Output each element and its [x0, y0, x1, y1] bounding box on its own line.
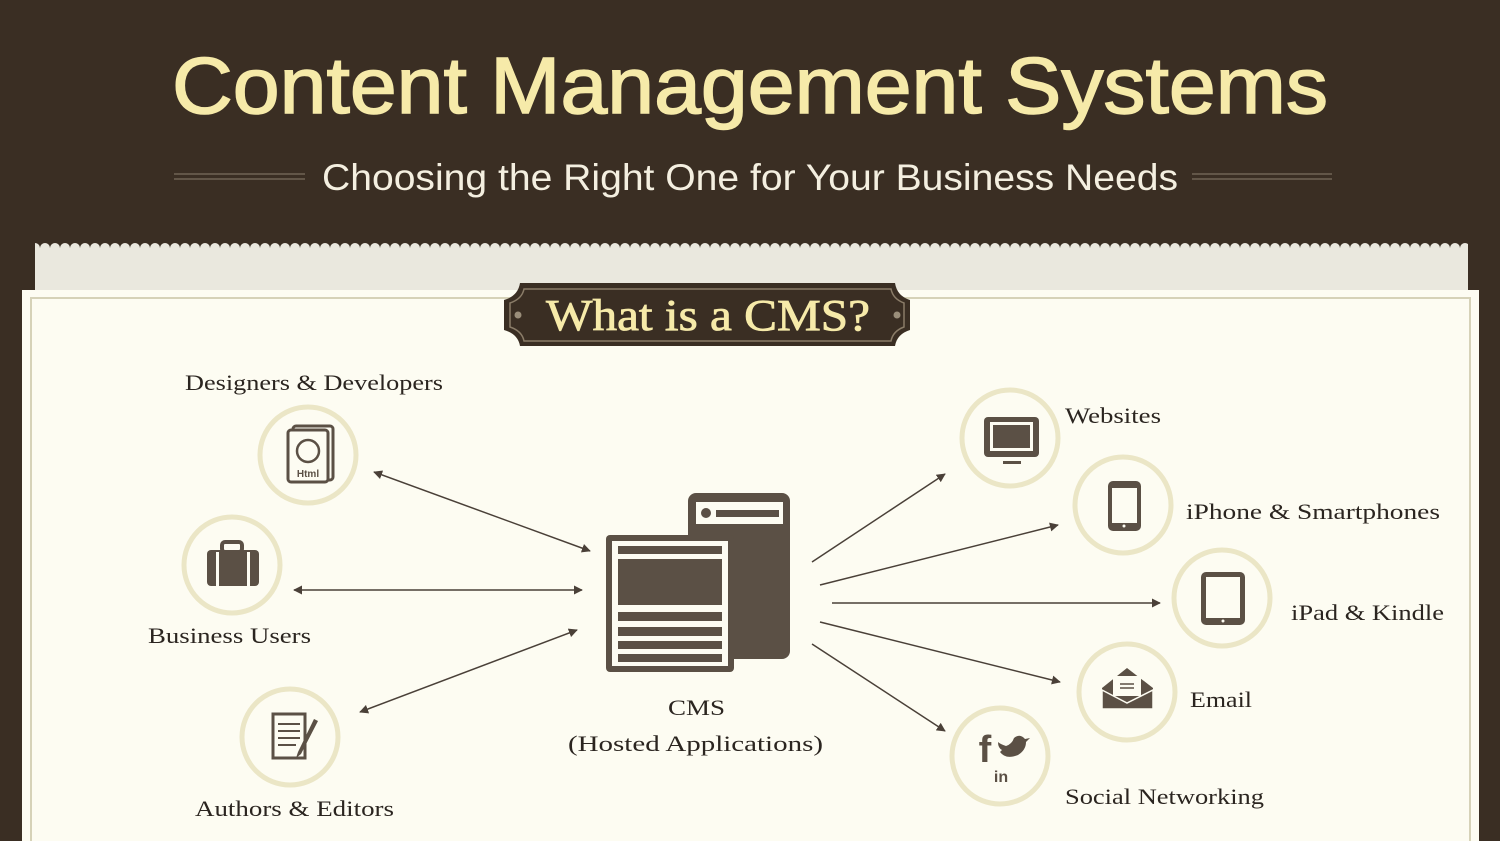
node: Designers & Developers [185, 370, 443, 503]
main panel [22, 290, 1479, 841]
arrows [294, 472, 1160, 731]
node: iPad & Kindle: iPad & Kindle [1291, 600, 1444, 625]
CMS label: (Hosted Applications) [568, 731, 823, 756]
banner: What is a CMS? [504, 283, 910, 346]
title: Content Management Systems [172, 41, 1328, 130]
banner: What is a CMS?: What is a CMS? [546, 291, 870, 340]
node: Websites [962, 390, 1161, 486]
node: iPhone & Smartphones: iPhone & Smartphones [1186, 499, 1440, 524]
node: Social Networking: f [979, 729, 992, 771]
node: iPhone & Smartphones [1075, 457, 1440, 553]
node: Authors & Editors [195, 689, 394, 821]
CMS label [568, 695, 823, 756]
node: Social Networking: Social Networking [1065, 784, 1264, 809]
node: Designers & Developers: Html [297, 469, 319, 480]
node: Social Networking: in [994, 769, 1008, 786]
icon: CMS server and page [606, 493, 790, 672]
node: Email: Email [1190, 687, 1252, 712]
node: Email [1079, 644, 1252, 740]
subtitle: Choosing the Right One for Your Business Needs [322, 157, 1178, 198]
node: Business Users: Business Users [148, 623, 311, 648]
node: Websites: Websites [1065, 403, 1161, 428]
node: Designers & Developers: Designers & Developers [185, 370, 443, 395]
node: Authors & Editors: Authors & Editors [195, 796, 394, 821]
CMS label: CMS [668, 695, 725, 720]
node: Business Users [148, 517, 311, 648]
paper strip [35, 240, 1468, 293]
node: Social Networking [952, 708, 1264, 809]
node: iPad & Kindle [1174, 550, 1444, 646]
